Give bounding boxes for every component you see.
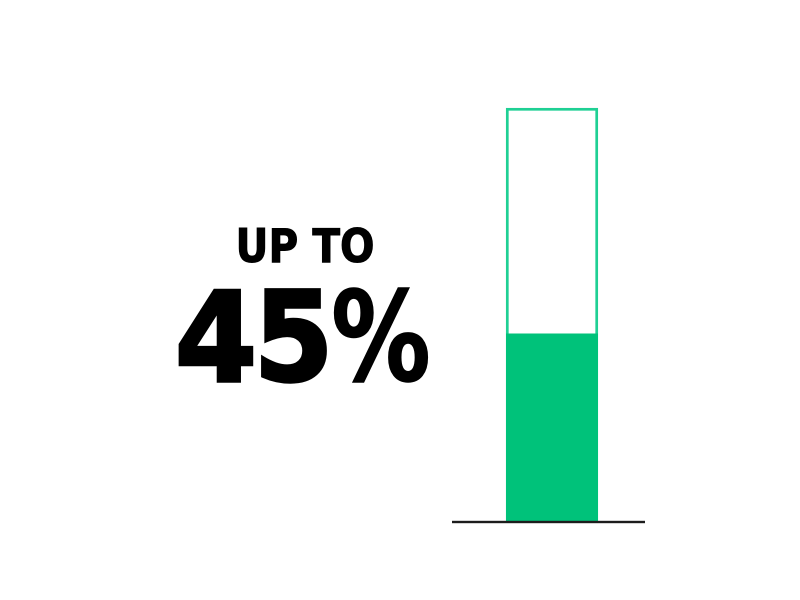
bar outline <box>507 109 597 521</box>
statistic: 45% <box>175 266 431 411</box>
statistic: 45%: 5 <box>254 266 333 410</box>
label: up to: UP TO <box>236 219 374 273</box>
bar fill <box>506 334 598 522</box>
statistic: 45%: 4 <box>175 266 257 411</box>
baseline <box>452 521 645 523</box>
chart: progress bar filled to 45% <box>452 109 645 523</box>
statistic: 45%: % <box>331 266 431 410</box>
